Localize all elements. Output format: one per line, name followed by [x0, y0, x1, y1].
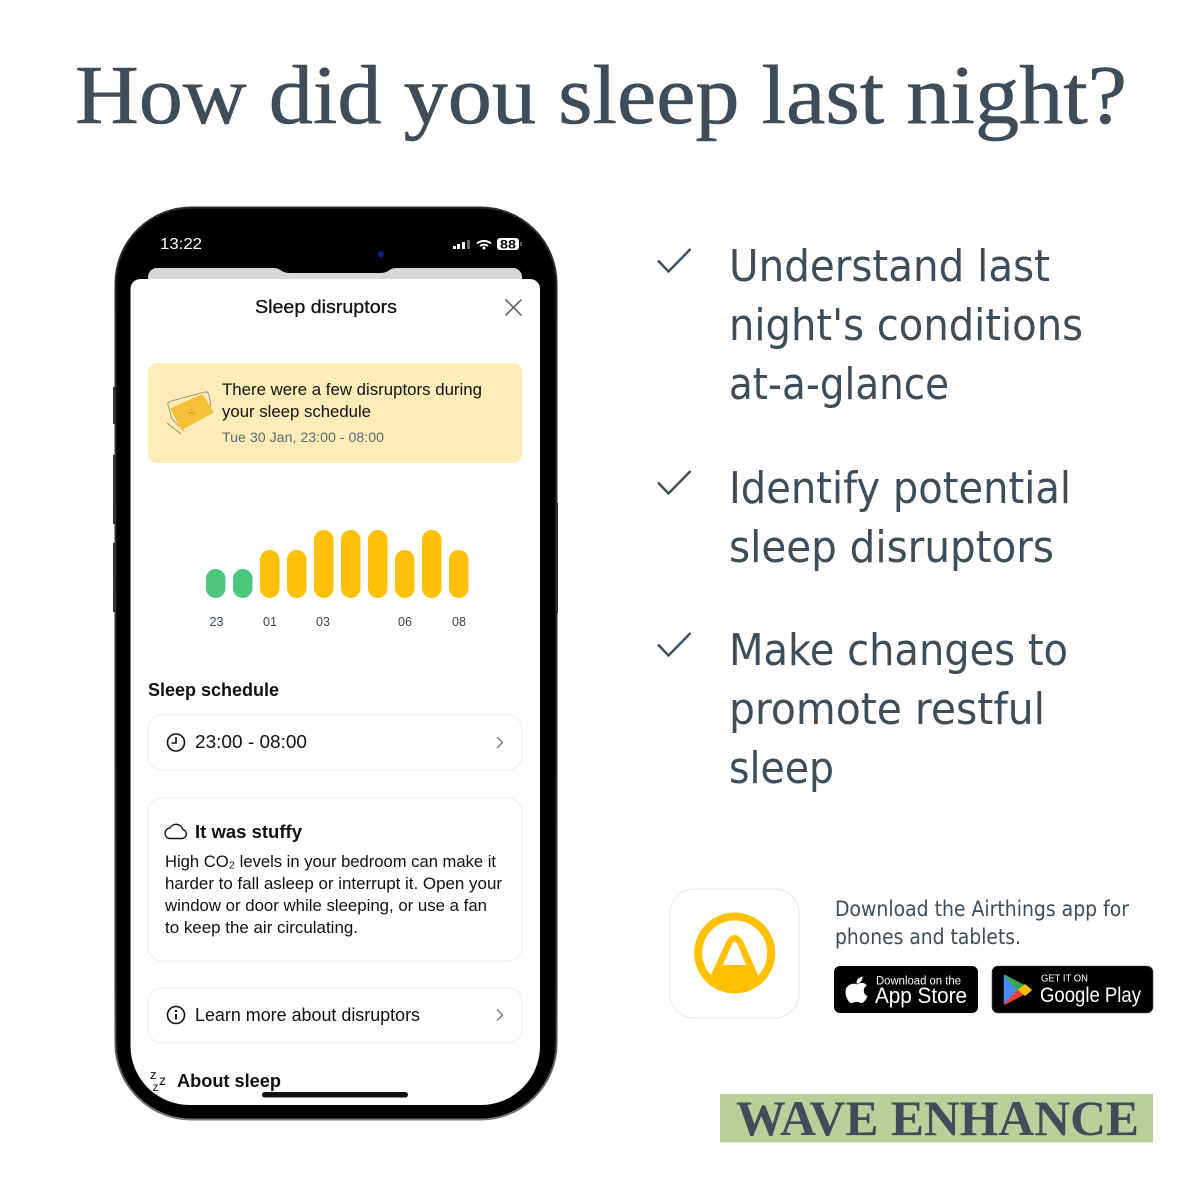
- icon: apple: [845, 976, 868, 1003]
- benefit 1: [658, 241, 1083, 410]
- disruptor banner: There were a few disruptors during: [222, 380, 482, 399]
- about sleep: [150, 1067, 281, 1094]
- app store badge: Download on the: [876, 976, 961, 988]
- bar chart: 06: [398, 615, 412, 629]
- bar chart: 01: [263, 615, 277, 629]
- google play badge: GET IT ON: [1041, 972, 1088, 984]
- bar chart: 08: [452, 615, 466, 629]
- status time: 13:22: [160, 236, 202, 253]
- benefit 2: [658, 463, 1071, 573]
- schedule row: 23:00 - 08:00: [195, 731, 307, 752]
- status icons: [453, 238, 522, 252]
- stuffy card: It was stuffy: [195, 822, 302, 842]
- back sheet: [148, 268, 522, 298]
- wave enhance logo: WAVE ENHANCE: [736, 1090, 1139, 1146]
- benefit 3: sleep: [729, 743, 834, 794]
- camera dot: [378, 250, 384, 258]
- stuffy card: High CO₂ levels in your bedroom can make it: [165, 852, 496, 871]
- icon: zzz: z: [152, 1080, 158, 1094]
- stuffy card: harder to fall asleep or interrupt it. Open your: [165, 874, 502, 893]
- benefit 3: Make changes to: [729, 625, 1068, 676]
- phone mockup: [113, 208, 558, 1120]
- learn more row: Learn more about disruptors: [195, 1005, 420, 1025]
- icon: info: [168, 1006, 184, 1024]
- title: How did you sleep last night?: [75, 49, 1127, 142]
- disruptor banner: Tue 30 Jan, 23:00 - 08:00: [222, 430, 384, 445]
- download text: Download the Airthings app for: [835, 897, 1129, 921]
- bar chart: [206, 530, 468, 629]
- icon: zzz: [150, 1067, 166, 1094]
- icon: clock: [168, 734, 184, 751]
- benefit 2: sleep disruptors: [729, 522, 1054, 573]
- sleep schedule heading: Sleep schedule: [148, 680, 279, 700]
- disruptor banner: your sleep schedule: [222, 402, 371, 421]
- icon: play: [1004, 976, 1031, 1004]
- benefits list: [658, 241, 1083, 794]
- screen: [130, 279, 540, 1105]
- stuffy card: [148, 798, 522, 961]
- status icons: 88: [500, 238, 516, 252]
- benefit 1: at-a-glance: [729, 359, 949, 410]
- app store badge: App Store: [875, 983, 967, 1008]
- bar chart: 03: [316, 615, 330, 629]
- google play badge: [992, 966, 1153, 1013]
- icon: cloud: [165, 824, 186, 838]
- stuffy card: to keep the air circulating.: [165, 918, 358, 937]
- home indicator: [262, 1092, 408, 1098]
- disruptor banner: [148, 363, 522, 463]
- phone body: [116, 208, 556, 1120]
- benefit 2: Identify potential: [729, 463, 1071, 514]
- app store badge: [834, 966, 978, 1013]
- about sleep: About sleep: [177, 1070, 281, 1091]
- schedule row: [148, 715, 522, 770]
- learn more row: [148, 988, 522, 1043]
- notch: [270, 262, 400, 273]
- google play badge: Google Play: [1040, 984, 1141, 1007]
- icon: zzz: z: [150, 1067, 156, 1082]
- stuffy card: window or door while sleeping, or use a fan: [164, 896, 487, 915]
- screen heading: Sleep disruptors: [255, 296, 397, 317]
- icon: Airthings app: [670, 889, 799, 1018]
- benefit 1: Understand last: [729, 241, 1050, 292]
- bar chart: 23: [210, 615, 223, 629]
- download text: phones and tablets.: [835, 925, 1021, 949]
- icon: pillow: [167, 392, 212, 434]
- benefit 1: night's conditions: [729, 300, 1083, 351]
- benefit 3: promote restful: [729, 684, 1045, 735]
- close icon: [506, 300, 522, 316]
- icon: zzz: z: [159, 1072, 166, 1088]
- side buttons: [113, 387, 558, 613]
- benefit 3: [658, 625, 1068, 794]
